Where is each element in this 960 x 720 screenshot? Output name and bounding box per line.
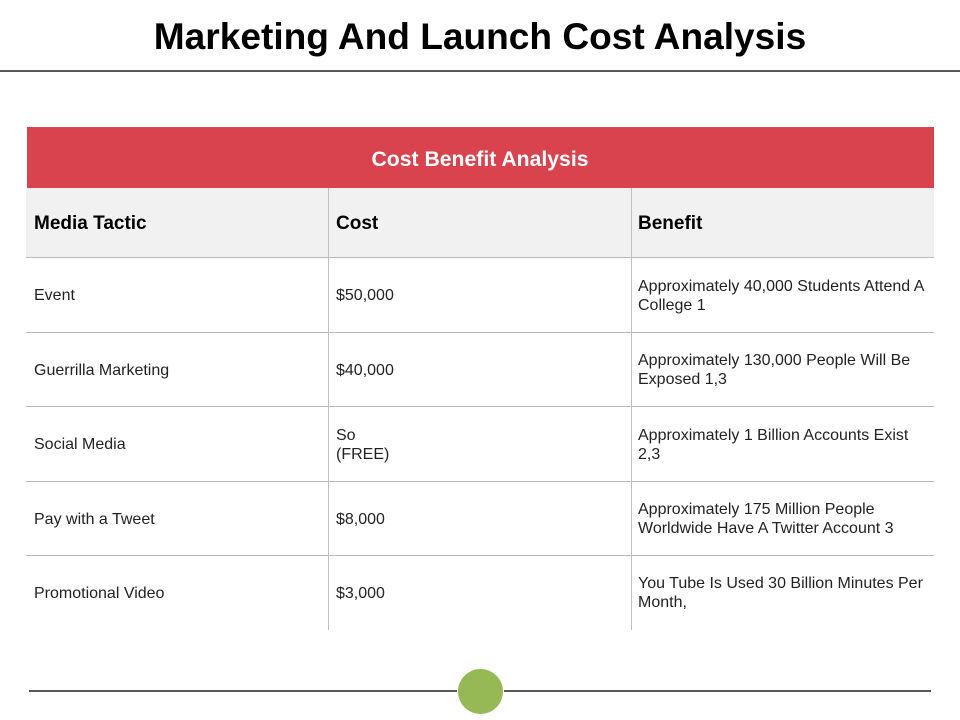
column header background <box>26 188 934 257</box>
footer line left <box>29 690 457 692</box>
column heading: cost: Cost <box>336 213 378 234</box>
title: Marketing And Launch Cost Analysis <box>154 15 806 57</box>
row 5 tactic: Promotional Video <box>34 585 164 602</box>
table banner <box>27 127 934 188</box>
row 1 benefit <box>638 278 924 314</box>
row 1 benefit: Approximately 40,000 Students Attend A <box>638 278 924 295</box>
column heading: benefit: Benefit <box>638 213 702 234</box>
row 2 benefit: Exposed 1,3 <box>638 371 727 388</box>
row 4 benefit <box>638 501 894 537</box>
row 1 benefit: College 1 <box>638 297 706 314</box>
row 2 benefit <box>638 352 910 388</box>
row 3 tactic: Social Media <box>34 436 126 453</box>
row 3 benefit: 2,3 <box>638 446 660 463</box>
footer line right <box>504 690 931 692</box>
row 1 cost: $50,000 <box>336 287 394 304</box>
icon: green circle <box>458 669 503 714</box>
row 3 benefit <box>638 427 908 463</box>
row 5 cost: $3,000 <box>336 585 385 602</box>
row 5 benefit: You Tube Is Used 30 Billion Minutes Per <box>638 575 923 592</box>
row 3 cost: (FREE) <box>336 446 389 463</box>
row 3 cost <box>336 427 389 463</box>
row 2 tactic: Guerrilla Marketing <box>34 362 169 379</box>
row 2 cost: $40,000 <box>336 362 394 379</box>
row 4 tactic: Pay with a Tweet <box>34 511 155 528</box>
panel: cost benefit table <box>26 127 934 257</box>
column heading: media tactic: Media Tactic <box>34 213 147 234</box>
row 4 benefit: Worldwide Have A Twitter Account 3 <box>638 520 894 537</box>
row 1 tactic: Event <box>34 287 75 304</box>
row 5 benefit <box>638 575 923 611</box>
row 3 benefit: Approximately 1 Billion Accounts Exist <box>638 427 908 444</box>
row 4 cost: $8,000 <box>336 511 385 528</box>
title divider line <box>0 70 960 72</box>
row 2 benefit: Approximately 130,000 People Will Be <box>638 352 910 369</box>
row 5 benefit: Month, <box>638 594 687 611</box>
row 4 benefit: Approximately 175 Million People <box>638 501 875 518</box>
table banner heading: Cost Benefit Analysis <box>371 148 589 170</box>
row 3 cost: So <box>336 427 356 444</box>
